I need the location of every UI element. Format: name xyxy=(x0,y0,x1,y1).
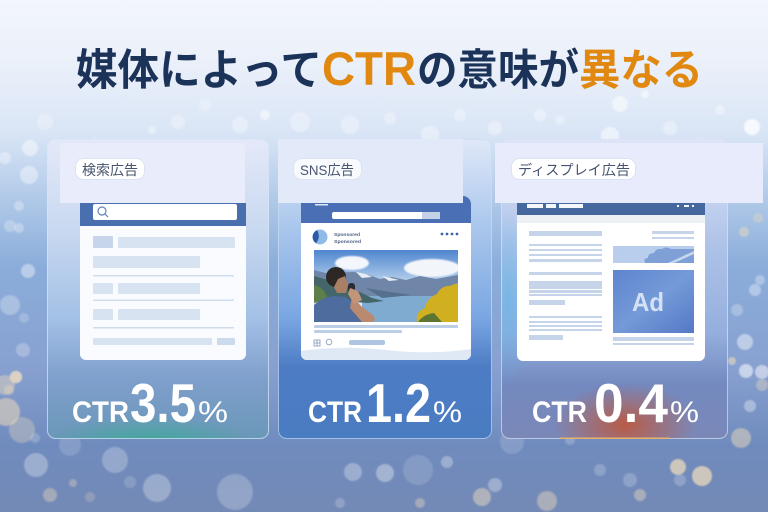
panel: SNS ads xyxy=(278,139,492,439)
metric: CTR 1.2% xyxy=(308,372,462,434)
label pill: search ads: 検索広告 xyxy=(82,162,138,178)
header block xyxy=(278,139,463,203)
label pill: SNS ads xyxy=(294,158,362,180)
web page mockup xyxy=(517,203,705,361)
label pill: display ads: ディスプレイ広告 xyxy=(518,162,630,178)
panel: search ads xyxy=(45,139,269,475)
title: 異なる xyxy=(579,47,703,95)
header block xyxy=(60,143,245,203)
title: の意味が xyxy=(417,47,579,95)
metric: CTR 1.2%: % xyxy=(433,396,462,429)
metric: CTR 1.2%: 1.2 xyxy=(366,372,431,434)
header block xyxy=(495,143,763,203)
title: 媒体によって xyxy=(76,47,322,95)
social feed mockup: Sponsored xyxy=(334,239,361,245)
image banner xyxy=(613,246,694,263)
metric: CTR 0.4%: 0.4 xyxy=(594,372,668,434)
search results mockup xyxy=(80,203,246,360)
metric: CTR 3.5%: CTR xyxy=(72,396,129,429)
avatar xyxy=(312,230,328,244)
metric: CTR 3.5% xyxy=(72,372,228,434)
metric: CTR 0.4%: CTR xyxy=(532,396,587,429)
label pill: SNS ads: SNS広告 xyxy=(300,162,354,178)
metric: CTR 3.5%: 3.5 xyxy=(130,372,196,434)
title: CTR xyxy=(322,42,416,95)
social feed mockup: Sponsored xyxy=(334,232,360,238)
metric: CTR 0.4%: % xyxy=(670,396,699,429)
icon: magnifier xyxy=(98,207,108,217)
icons: actions xyxy=(314,339,332,346)
label pill: search ads xyxy=(76,158,144,180)
label pill: display ads xyxy=(512,158,636,180)
metric: CTR 1.2%: CTR xyxy=(308,396,362,429)
social feed mockup xyxy=(301,196,471,360)
ad banner xyxy=(613,270,694,333)
metric: CTR 0.4% xyxy=(532,372,699,434)
ad banner: Ad xyxy=(632,287,664,317)
panel: display ads xyxy=(495,139,763,439)
metric: CTR 3.5%: % xyxy=(198,396,228,429)
photo: man at lake xyxy=(314,250,460,322)
title xyxy=(76,42,703,95)
